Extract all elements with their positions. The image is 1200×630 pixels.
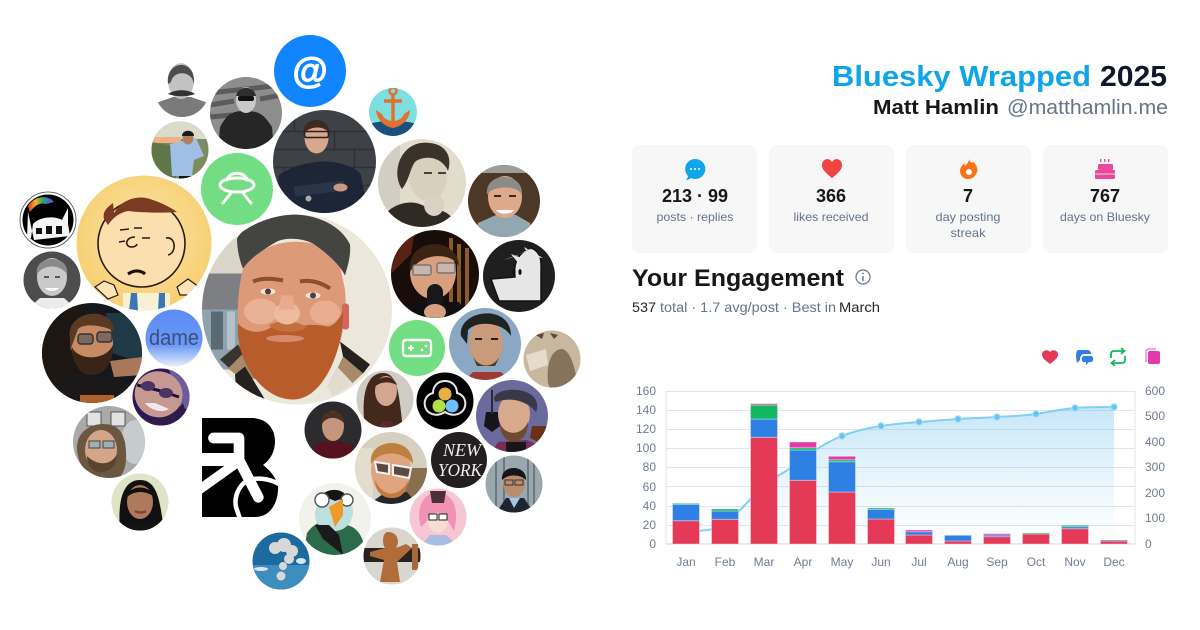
logo: black R monogram [196,418,279,519]
icon: reposts arrows [1111,348,1125,366]
month labels: May [831,555,853,569]
stat label line two: streak [950,226,987,240]
stat label: posts · replies [656,210,734,224]
heading: Your Engagement: Your Engagement [632,265,844,292]
icon: chat bubble [685,159,705,180]
icon: green UFO circle [201,153,273,225]
right axis labels: 600 [1145,384,1165,398]
right axis labels: 100 [1145,511,1165,525]
panel: posts and replies stat [632,145,757,253]
panel: avatar bubble cluster [20,35,581,590]
user name and handle: @matthamlin.me [1007,97,1168,119]
chart: monthly engagement stacked bars with cumulative line [636,384,1165,569]
month labels: Jun [871,555,891,569]
avatar: cloud question mark in blue sky [252,532,310,590]
month labels [676,555,1125,569]
bars: reposts [672,405,1088,534]
left axis labels: 100 [636,441,656,455]
title: Bluesky Wrapped 2025: 2025 [1100,61,1167,93]
left axis labels: 120 [636,422,656,436]
bars: quotes [750,404,1010,535]
cumulative line [686,407,1114,532]
avatar: man in sunglasses and hoodie [209,76,283,150]
month labels: Oct [1027,555,1046,569]
left axis labels: 60 [643,480,656,494]
stat label: days on Bluesky [1060,210,1150,224]
avatar: young man dark background [304,401,362,459]
title: Bluesky Wrapped 2025: Bluesky Wrapped [832,61,1091,93]
engagement summary: March [839,299,880,315]
avatar: New York logo [431,432,487,488]
avatar: woman with black hair [111,473,169,531]
user name and handle: Matt Hamlin [873,97,999,119]
stat value: 213 · 99 [662,186,728,206]
stat value: 767 [1090,186,1120,206]
avatar: pink haired anime girl [409,488,467,546]
icon: replies bubbles [1076,350,1093,365]
avatar: man with microphone [391,230,479,320]
avatar: terracotta statue [363,527,421,585]
stat value: 366 [816,186,846,206]
avatar: dame wordmark [146,310,202,366]
month labels: Feb [715,555,736,569]
icon: likes heart [1042,350,1058,364]
icon: quotes squares [1146,349,1160,364]
avatar: woman with long hair [356,370,414,428]
avatar: New York logo: YORK [438,460,483,480]
engagement summary [632,299,880,315]
stat label: likes received [794,210,868,224]
icon: green gamepad circle [389,320,445,376]
avatar: three color circles logo [416,372,474,430]
bars: likes [672,437,1128,544]
avatar: puffin in green jacket [299,483,371,555]
month labels: Sep [986,555,1008,569]
icon: flame [960,159,977,179]
left axis labels: 0 [649,537,656,551]
month labels: Jul [911,555,927,569]
month labels: Dec [1103,555,1125,569]
avatar: blonde man grayscale [23,251,81,309]
user name and handle [873,97,1168,119]
stat value: 7 [963,186,973,206]
left axis labels: 140 [636,403,656,417]
icon: blue at sign [274,35,346,107]
left axis labels: 160 [636,384,656,398]
avatar: man with glasses and beard [42,303,142,403]
avatar: man with glasses on brick wall [272,110,376,214]
avatar: man in fur hat [73,406,149,478]
left axis labels: 20 [643,518,656,532]
avatar: dame wordmark: dame [149,325,199,350]
avatar: large profile photo of bearded man in cap [202,214,392,404]
avatar: cartoon boy on yellow [76,175,212,311]
panel: streak stat [906,145,1031,253]
avatar: man in cap with guitars [476,380,548,452]
month labels: Nov [1064,555,1086,569]
right axis labels: 300 [1145,460,1165,474]
avatar: cat with rainbow logo [20,192,76,248]
left axis labels: 80 [643,460,656,474]
panel: days on Bluesky stat [1043,145,1168,253]
grid lines [666,391,1135,544]
avatar: New York logo: NEW [442,440,483,460]
avatar: ghost logo on black [483,240,555,312]
avatar: man with glasses in suit [485,455,543,513]
avatar: smiling grey haired man [468,165,540,237]
avatar: man with white sunglasses [355,432,427,504]
avatar: sepia tapestry [523,330,581,388]
line points [839,404,1117,439]
engagement summary: total · 1.7 avg/post · Best in [660,299,836,315]
panel: likes stat [769,145,894,253]
icon: blue at sign: @ [292,50,328,91]
icon: heart [822,159,842,178]
legend: engagement type icons [1042,348,1160,366]
month labels: Aug [947,555,969,569]
avatar: purple tinted man in glasses [132,368,190,426]
icon: info [856,270,870,284]
right axis labels: 400 [1145,435,1165,449]
right axis labels: 500 [1145,409,1165,423]
avatar: mustache man [158,63,206,117]
month labels: Apr [794,555,812,569]
avatar: dark haired man [449,308,521,380]
avatar: anchor icon [369,88,417,136]
avatar: sepia portrait of curly haired man [378,139,466,227]
right axis labels [1145,384,1165,551]
stat label: day posting [936,210,1000,224]
bars: replies [672,419,1128,541]
month labels: Jan [676,555,696,569]
left axis labels [636,384,656,551]
cumulative area [686,407,1114,544]
month labels: Mar [754,555,774,569]
icon: birthday cake [1095,159,1115,179]
left axis labels: 40 [643,499,656,513]
right axis labels: 0 [1145,537,1152,551]
engagement summary: 537 [632,299,656,315]
avatar: man in blue shirt at sunset [151,121,209,180]
right axis labels: 200 [1145,486,1165,500]
